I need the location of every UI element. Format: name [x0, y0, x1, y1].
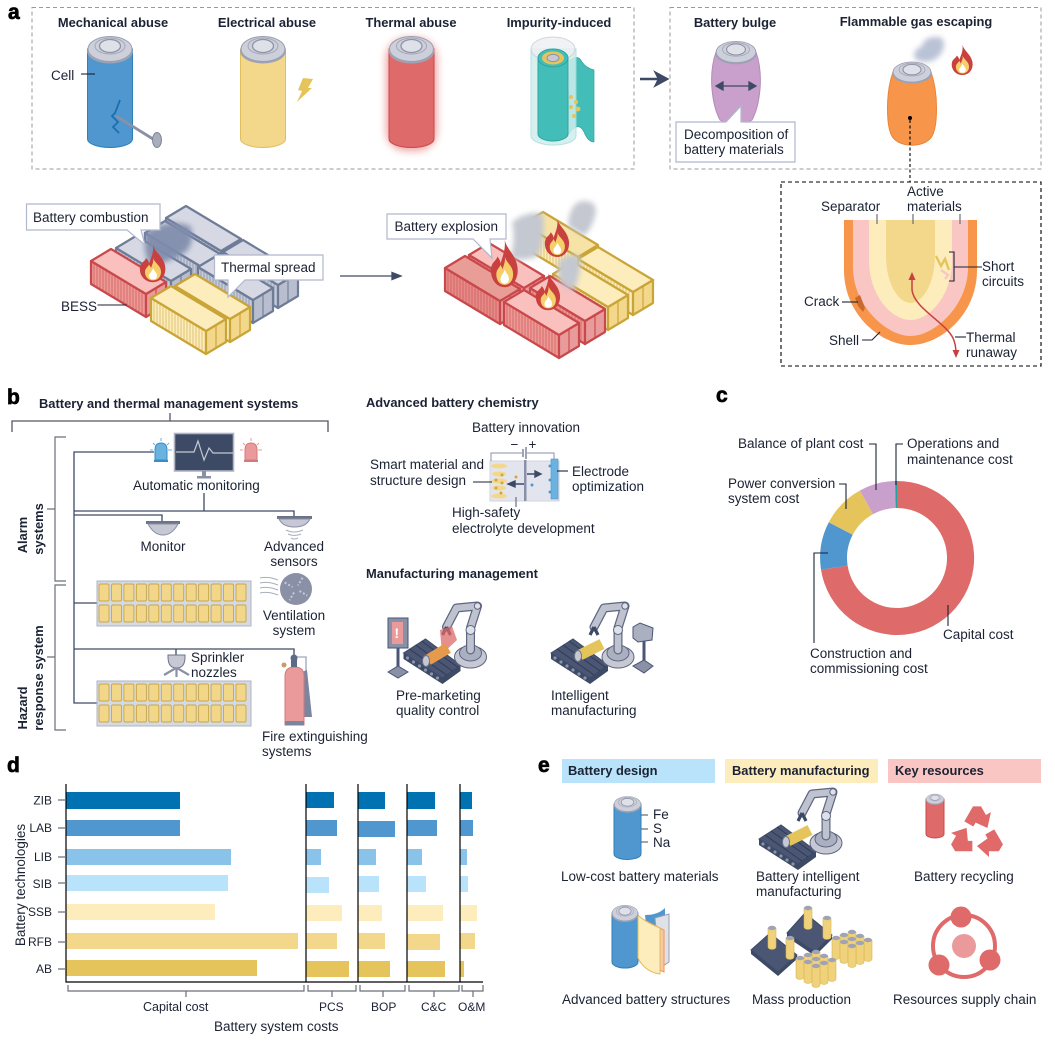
- panel letter e: e: [538, 754, 550, 777]
- x axis labels: BOP: [371, 1000, 396, 1014]
- label: ventilation system: [263, 608, 325, 638]
- heading: flammable gas escaping: Flammable gas escaping: [840, 14, 992, 29]
- label: crack: [804, 294, 858, 309]
- label: pre-marketing quality control: quality control: [396, 703, 479, 718]
- icon: recycling: [926, 794, 1007, 860]
- label: advanced battery structures: Advanced battery structures: [562, 992, 730, 1007]
- callout: decomposition of battery materials: battery materials: [684, 142, 784, 157]
- arrow: abuse to failure: [640, 73, 667, 85]
- arrow: thermal runaway: [908, 272, 960, 358]
- callout: battery explosion: [387, 214, 506, 258]
- label: crack: Crack: [804, 294, 840, 309]
- label: electrode optimization: Electrode: [572, 464, 629, 479]
- label: fire extinguishing systems: Fire extinguishing: [262, 729, 368, 744]
- panel e: future directions: [538, 754, 1041, 1007]
- panel a: battery failure: [8, 1, 1041, 366]
- icon: low-cost battery cell: S: [653, 821, 662, 836]
- O&M bars: [460, 792, 477, 977]
- label: balance of plant cost: [738, 436, 876, 490]
- bracket: hazard response system: [15, 585, 66, 731]
- bracket: alarm systems: systems: [31, 503, 46, 555]
- icon: advanced sensor: [277, 516, 312, 539]
- label: ventilation system: Ventilation: [263, 608, 325, 623]
- label: low-cost battery materials: Low-cost battery materials: [561, 869, 719, 884]
- label: advanced sensors: sensors: [270, 554, 318, 569]
- callout: battery explosion: Battery explosion: [394, 219, 498, 234]
- label: operations and maintenance cost: maintenance cost: [907, 452, 1013, 467]
- y axis labels: [28, 794, 52, 976]
- label: smart material and structure design: [370, 457, 492, 488]
- label: capital cost: Capital cost: [943, 627, 1014, 642]
- y axis labels: LAB: [29, 821, 52, 835]
- label: monitor: Monitor: [140, 539, 186, 554]
- header: battery manufacturing: [725, 759, 878, 783]
- label: thermal runaway: [955, 330, 1017, 360]
- label: battery intelligent manufacturing: Battery intelligent: [756, 869, 860, 884]
- icon: overheated red cell: [386, 36, 437, 151]
- label: cell: [51, 68, 95, 83]
- label: sprinkler nozzles: [191, 650, 245, 680]
- label: short circuits: circuits: [982, 274, 1024, 289]
- bracket: hazard response system: Hazard: [15, 686, 30, 729]
- bracket: hazard response system: response system: [31, 625, 46, 731]
- label: construction and commissioning cost: Construction and: [810, 646, 912, 661]
- panel: abuse types: [32, 8, 634, 169]
- header: key resources: [888, 759, 1041, 783]
- label: intelligent manufacturing: manufacturing: [551, 703, 637, 718]
- icon: automatic monitoring screen: [174, 434, 234, 478]
- callout: decomposition of battery materials: [676, 106, 795, 162]
- label: cell: Cell: [51, 68, 74, 83]
- heading: advanced battery chemistry: Advanced battery chemistry: [366, 395, 539, 410]
- arrow: spread to explosion: [340, 272, 401, 280]
- label: fire extinguishing systems: [262, 729, 368, 759]
- x axis title: Battery system costs: [214, 1019, 339, 1034]
- diagram: electrochemical cell: −: [510, 437, 518, 452]
- label: fire extinguishing systems: systems: [262, 744, 312, 759]
- icon: teal cell with impurities: [531, 37, 594, 145]
- icon: monitor detector: [146, 521, 180, 535]
- label: active materials: materials: [907, 199, 962, 214]
- label: battery intelligent manufacturing: manufacturing: [756, 884, 842, 899]
- icon: resources supply chain: [928, 906, 1000, 977]
- header: battery design: Battery design: [568, 763, 658, 778]
- panel letter c: c: [716, 384, 728, 407]
- PCS bars: [306, 792, 349, 977]
- label: capital cost: [943, 605, 1014, 642]
- icon: pre-marketing quality control: !: [394, 626, 399, 641]
- label: high-safety electrolyte development: electrolyte development: [452, 521, 595, 536]
- label: shell: [829, 332, 880, 348]
- label: resources supply chain: Resources supply chain: [893, 992, 1036, 1007]
- label: mass production: Mass production: [752, 992, 851, 1007]
- icon: yellow cell with bolt: [240, 36, 313, 148]
- donut chart: [820, 481, 974, 635]
- callout: battery combustion: Battery combustion: [33, 210, 149, 225]
- label: shell: Shell: [829, 333, 859, 348]
- label: short circuits: Short: [982, 259, 1015, 274]
- label: short circuits: [949, 252, 1024, 289]
- heading: manufacturing management: Manufacturing management: [366, 566, 539, 581]
- x axis labels: O&M: [458, 1000, 485, 1014]
- callout: thermal spread: Thermal spread: [221, 260, 316, 275]
- label: pre-marketing quality control: Pre-marketing: [396, 688, 481, 703]
- label: power conversion system cost: system cost: [728, 491, 800, 506]
- icon: robot arm: [759, 789, 842, 870]
- heading: mechanical abuse: Mechanical abuse: [58, 15, 168, 30]
- label: BESS: [61, 299, 126, 314]
- label: active materials: [907, 184, 962, 224]
- label: construction and commissioning cost: commissioning cost: [810, 661, 928, 676]
- bracket: alarm systems: [15, 437, 66, 581]
- label: balance of plant cost: Balance of plant cost: [738, 436, 864, 451]
- x axis labels: Capital cost: [143, 1000, 209, 1014]
- label: smart material and structure design: structure design: [370, 473, 466, 488]
- callout: battery combustion: [26, 204, 160, 245]
- icon: flames: [491, 219, 569, 310]
- icon: low-cost battery cell: [614, 796, 671, 860]
- panel letter d: d: [7, 754, 20, 777]
- y axis labels: ZIB: [33, 794, 52, 808]
- header: battery design: [562, 759, 715, 783]
- battery rack 2: [97, 681, 251, 726]
- label: thermal runaway: Thermal: [966, 330, 1016, 345]
- label: electrode optimization: [557, 464, 644, 494]
- panel b: safety management: [7, 386, 653, 759]
- icon: bulged purple cell: [712, 41, 760, 125]
- heading: thermal abuse: Thermal abuse: [366, 15, 456, 30]
- label: power conversion system cost: [728, 476, 846, 509]
- icon: fire extinguisher: [282, 654, 312, 726]
- y axis title: Battery technologies: [13, 824, 28, 946]
- x axis labels: [143, 1000, 485, 1014]
- label: construction and commissioning cost: [810, 553, 928, 676]
- panel: failure symptoms: [670, 8, 1041, 182]
- icon: low-cost battery cell: Fe: [653, 807, 669, 822]
- bracket: alarm systems: Alarm: [15, 517, 30, 553]
- x axis labels: PCS: [319, 1000, 344, 1014]
- icon: sprinkler nozzles: [164, 655, 189, 677]
- icon: pre-marketing quality control: [388, 603, 486, 684]
- y axis labels: AB: [36, 962, 52, 976]
- label: separator: [821, 199, 881, 224]
- icon: red alarm: [240, 438, 262, 462]
- icon: orange cell venting gas: [888, 37, 973, 145]
- label: BESS: BESS: [61, 299, 97, 314]
- label: active materials: Active: [907, 184, 944, 199]
- label: battery innovation: Battery innovation: [472, 420, 580, 435]
- illustration: BESS explosion: [387, 201, 653, 358]
- y axis labels: SIB: [33, 877, 52, 891]
- icon: mass production: [751, 906, 872, 987]
- panel d: bar chart: [7, 754, 485, 1034]
- panel letter b: b: [7, 386, 20, 409]
- label: sprinkler nozzles: nozzles: [191, 665, 237, 680]
- BOP bars: [358, 792, 395, 977]
- header: battery manufacturing: Battery manufacturing: [732, 763, 870, 778]
- label: operations and maintenance cost: Operations and: [907, 436, 999, 451]
- label: advanced sensors: [264, 539, 324, 569]
- label: battery intelligent manufacturing: [756, 869, 860, 899]
- header: key resources: Key resources: [895, 763, 984, 778]
- callout: thermal spread: [214, 255, 323, 297]
- label: battery recycling: Battery recycling: [914, 869, 1014, 884]
- panel letter a: a: [8, 1, 20, 24]
- y axis labels: SSB: [28, 905, 52, 919]
- label: high-safety electrolyte development: [452, 497, 595, 536]
- panel: cell cross-section: [781, 182, 1041, 366]
- label: pre-marketing quality control: [396, 688, 481, 718]
- heading: impurity-induced: Impurity-induced: [507, 15, 611, 30]
- icon: blue cell with nail: [87, 36, 162, 148]
- label: operations and maintenance cost: [896, 436, 1013, 485]
- panel c: system cost donut: [716, 384, 1014, 676]
- label: advanced sensors: Advanced: [264, 539, 324, 554]
- icon: low-cost battery cell: Na: [653, 835, 671, 850]
- icon: blue alarm: [150, 438, 172, 462]
- y axis labels: LIB: [34, 850, 52, 864]
- heading: battery and thermal management systems: Battery and thermal management systems: [39, 396, 298, 411]
- capital cost bars: [66, 792, 298, 976]
- label: power conversion system cost: Power conversion: [728, 476, 835, 491]
- label: sprinkler nozzles: Sprinkler: [191, 650, 245, 665]
- x axis labels: C&C: [421, 1000, 447, 1014]
- heading: electrical abuse: Electrical abuse: [218, 15, 316, 30]
- label: automatic monitoring: Automatic monitoring: [133, 478, 260, 493]
- heading: battery bulge: Battery bulge: [694, 15, 776, 30]
- icon: intelligent manufacturing: [551, 603, 653, 684]
- label: high-safety electrolyte development: High-safety: [452, 505, 521, 520]
- diagram: electrochemical cell: [490, 437, 559, 501]
- label: electrode optimization: optimization: [572, 479, 644, 494]
- icon: ventilation fan: [260, 571, 314, 607]
- C&C bars: [407, 792, 445, 977]
- callout: decomposition of battery materials: Decomposition of: [684, 127, 789, 142]
- diagram: layered shell: [844, 220, 977, 345]
- label: thermal runaway: runaway: [966, 345, 1017, 360]
- icon: flame on red container: [140, 245, 165, 282]
- diagram: electrochemical cell: +: [528, 437, 536, 452]
- y axis labels: RFB: [28, 935, 52, 949]
- illustration: BESS thermal spread: [26, 204, 323, 354]
- label: intelligent manufacturing: Intelligent: [551, 688, 609, 703]
- label: smart material and structure design: Smart material and: [370, 457, 484, 472]
- label: ventilation system: system: [273, 623, 315, 638]
- label: intelligent manufacturing: [551, 688, 637, 718]
- icon: advanced battery structures: [612, 905, 669, 974]
- battery rack 1: [97, 581, 251, 626]
- label: separator: Separator: [821, 199, 881, 214]
